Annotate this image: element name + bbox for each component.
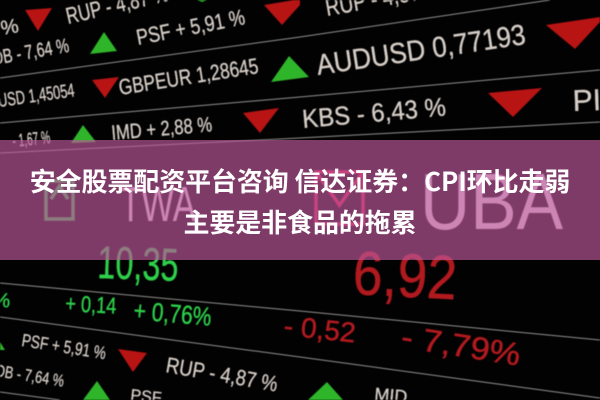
title: 主要是非食品的拖累 xyxy=(183,203,417,240)
logos and large values behind banner xyxy=(46,157,564,246)
green up arrows xyxy=(0,0,343,400)
ticker: RUP lower: RUP - 4,87 % xyxy=(164,352,280,397)
value: -0,52: - 0,52 xyxy=(282,310,357,348)
logo: green box with arrow xyxy=(46,181,73,219)
ticker: KBS: KBS - 6,43 % xyxy=(301,92,447,134)
logo text: UBA: UBA xyxy=(420,157,564,246)
ticker: minus 1,67: - 1,67 % xyxy=(11,127,51,151)
value: 10,35: 10,35 xyxy=(97,236,179,291)
ticker: PSF lower: PSF + 5,91 % xyxy=(20,330,107,363)
value: +0,14: + 0,14 xyxy=(65,290,117,319)
ticker: IMD: IMD + 2,88 % xyxy=(110,113,213,145)
ticker: AUDUSD: AUDUSD 0,77193 xyxy=(314,19,528,82)
title: 安全股票配资平台咨询 信达证券：CPI环比走弱 xyxy=(30,162,570,199)
value: -7,79%: - 7,79% xyxy=(399,318,523,373)
value: 6,92: 6,92 xyxy=(351,239,459,313)
ticker: GBPEUR: GBPEUR 1,28645 xyxy=(117,53,260,100)
upper ticker labels xyxy=(0,0,600,151)
lower ticker labels xyxy=(0,330,408,400)
ticker: USD: USD 1,45054 xyxy=(0,80,76,112)
translucent purple banner xyxy=(0,140,600,260)
logo text: TWA: TWA xyxy=(120,178,196,232)
logo: red M box xyxy=(316,172,363,224)
ticker: PSF: PSF + 5,91 % xyxy=(134,4,247,50)
red values xyxy=(282,239,523,373)
title xyxy=(30,162,570,240)
green values xyxy=(0,236,213,332)
value: +0,76%: + 0,76% xyxy=(132,295,213,332)
